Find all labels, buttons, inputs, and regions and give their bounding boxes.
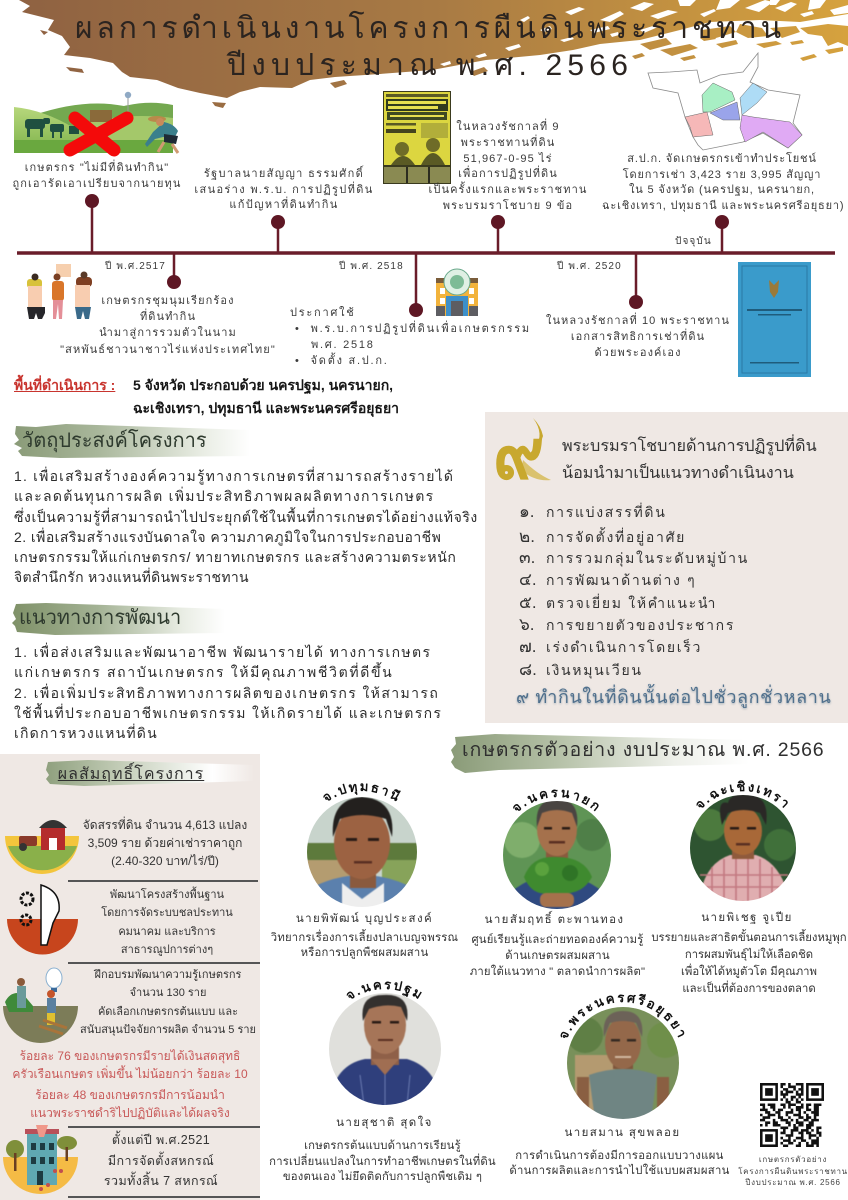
item 1: ๑. <box>519 502 535 521</box>
result: infrastructure: คมนาคม และบริการ <box>118 926 216 938</box>
icon: training farmers <box>3 964 79 1044</box>
objectives text <box>14 466 478 585</box>
operating area: 5 จังหวัด ประกอบด้วย นครปฐม, นครนายก, <box>133 377 393 393</box>
description: Ayutthaya farmer <box>502 1149 737 1179</box>
name: Ayutthaya farmer: นายสมาน สุขพลอย <box>565 1127 680 1139</box>
icon: blue title book <box>738 262 811 377</box>
result: cooperatives: ตั้งแต่ปี พ.ศ.2521 <box>112 1133 210 1147</box>
description: Pathum Thani farmer: หรือการปลูกพืชผสมผสาน <box>301 947 428 959</box>
icon: ALRO building <box>436 268 478 316</box>
QR caption <box>733 1154 848 1188</box>
banner brush stroke <box>19 0 848 108</box>
title: ผลการดำเนินงานโครงการผืนดินพระราชทาน <box>75 12 785 45</box>
item 5: ตรวจเยี่ยม ให้คำแนะนำ <box>546 595 717 611</box>
description: Chachoengsao farmer: เพื่อให้ได้หมูตัวโต มีคุณภาพ <box>681 966 817 978</box>
label: present: ปัจจุบัน <box>675 236 712 247</box>
text: farmers rally <box>60 294 276 356</box>
portrait and province: Chachoengsao: จ.ฉะเชิงเทรา <box>696 780 788 808</box>
policy heading: พระบรมราโชบายด้านการปฏิรูปที่ดิน <box>562 437 817 455</box>
result highlight: royal guidance: แนวพระราชดำริไปปฏิบัติและได้ผลจริง <box>30 1106 230 1120</box>
text: King Rama 10 grants documents: เอกสารสิทธิการเช่าที่ดิน <box>571 331 705 343</box>
item 1 <box>519 502 666 521</box>
title <box>75 10 785 82</box>
item 2: การจัดตั้งที่อยู่อาศัย <box>546 529 686 545</box>
objectives text: จิตสำนึกรัก หวงแหนที่ดินพระราชทาน <box>14 569 249 585</box>
icon: farm with red cross <box>14 92 180 156</box>
farmer: Pathum Thani <box>271 783 458 959</box>
item 3: ๓. <box>519 548 535 567</box>
text: farmers rally: "สหพันธ์ชาวนาชาวไร่แห่งประเทศไทย" <box>60 344 276 356</box>
portrait and province: Nakhon Nayok <box>503 790 611 909</box>
development text: ใช้พื้นที่ประกอบอาชีพเกษตรกรรม ให้เกิดรายได้ และเกษตรกร <box>14 705 442 721</box>
text: farmers rally: นำมาสู่การรวมตัวในนาม <box>99 327 237 339</box>
heading: development: แนวทางการพัฒนา <box>19 607 181 629</box>
result: training: จำนวน 130 ราย <box>130 987 206 999</box>
text: ALRO tenants: ฉะเชิงเทรา, ปทุมธานี และพระนครศรีอยุธยา) <box>602 200 844 212</box>
text: farmers rally: เกษตรกรชุมนุมเรียกร้อง <box>101 295 235 307</box>
result highlight: income: ครัวเรือนเกษตร เพิ่มขึ้น ไม่น้อยกว่า ร้อยละ 10 <box>12 1067 248 1081</box>
icon: protesters <box>27 264 92 319</box>
description: Chachoengsao farmer: และเป็นที่ต้องการของตลาด <box>682 983 816 995</box>
panel: project results <box>0 754 260 1200</box>
operating area <box>14 374 399 417</box>
text: landless farmers: เกษตรกร "ไม่มีที่ดินทำกิน" <box>25 162 169 174</box>
QR caption: โครงการผืนดินพระราชทาน <box>738 1166 848 1176</box>
description: Nakhon Nayok farmer: ภายใต้แนวทาง " ตลาดนำการผลิต" <box>470 966 645 978</box>
icon: farm semicircle <box>5 820 79 874</box>
brush heading: model farmers <box>451 734 720 773</box>
label: year 2517: ปี พ.ศ.2517 <box>105 261 166 272</box>
heading: objectives: วัตถุประสงค์โครงการ <box>22 430 207 452</box>
result: infrastructure: สาธารณูปการต่างๆ <box>121 944 213 956</box>
text: ALRO tenants <box>602 152 844 212</box>
item 8 <box>519 660 643 679</box>
text: King Rama 9 grants land: พระบรมราโชบาย 9 ข้อ <box>443 200 573 212</box>
text: King Rama 9 grants land: ในหลวงรัชกาลที่ 9 <box>456 121 560 133</box>
text: King Rama 9 grants land <box>429 118 587 212</box>
icon: yellow poster <box>383 91 451 184</box>
icon: cooperative building <box>3 1121 79 1199</box>
result: training: สนับสนุนปัจจัยการผลิต จำนวน 5 ราย <box>80 1024 256 1036</box>
result: cooperatives: รวมทั้งสิ้น 7 สหกรณ์ <box>104 1174 218 1188</box>
name: Chachoengsao farmer: นายพิเชฐ จูเปีย <box>701 912 793 924</box>
text: King Rama 10 grants documents <box>546 312 730 359</box>
text: law announced: • พ.ร.บ.การปฏิรูปที่ดินเพื่อเกษตรกรรม <box>295 323 531 335</box>
QR caption: เกษตรกรตัวอย่าง <box>759 1155 827 1164</box>
result highlight: income <box>0 1047 260 1083</box>
description: Pathum Thani farmer: วิทยากรเรื่องการเลี้ยงปลาเบญจพรรณ <box>271 932 458 944</box>
description: Nakhon Pathom farmer <box>265 1139 500 1186</box>
item 8: เงินหมุนเวียน <box>546 662 643 678</box>
text: King Rama 10 grants documents: ด้วยพระองค์เอง <box>594 347 682 359</box>
brush heading: results <box>46 760 241 786</box>
text: draft land reform bill: รัฐบาลนายสัญญา ธรรมศักดิ์ <box>204 168 364 180</box>
result: cooperatives: มีการจัดตั้งสหกรณ์ <box>108 1154 214 1168</box>
result highlight: income: ร้อยละ 76 ของเกษตรกรมีรายได้เงินสดสุทธิ <box>20 1049 240 1063</box>
item 6: การขยายตัวของประชากร <box>546 617 735 633</box>
description: Nakhon Pathom farmer: การเปลี่ยนแปลงในการทำอาชีพเกษตรในที่ดิน <box>269 1156 496 1168</box>
description: Nakhon Pathom farmer: เกษตรกรต้นแบบด้านการเรียนรู้ <box>304 1140 461 1152</box>
portrait and province: Nakhon Nayok: จ.นครนายก <box>513 790 599 812</box>
result: land allocation: (2.40-320 บาท/ไร่/ปี) <box>111 854 219 868</box>
text: farmers rally: ที่ดินทำกิน <box>140 311 196 323</box>
item 7: เร่งดำเนินการโดยเร็ว <box>546 639 702 655</box>
portrait and province: Chachoengsao <box>690 780 796 901</box>
text: ALRO tenants: โดยการเช่า 3,423 ราย 3,995 สัญญา <box>623 169 821 181</box>
objectives text: และลดต้นทุนการผลิต เพิ่มประสิทธิภาพผลผลิตทางการเกษตร <box>14 488 434 504</box>
description: Ayutthaya farmer: ด้านการผลิตและการนำไปใช้แบบผสมผสาน <box>509 1165 730 1177</box>
description: Nakhon Nayok farmer: ด้านเกษตรผสมผสาน <box>505 950 610 962</box>
name: Nakhon Nayok farmer: นายสัมฤทธิ์ ตะพานทอง <box>485 914 624 926</box>
result: training: คัดเลือกเกษตรกรต้นแบบ และ <box>98 1006 238 1018</box>
text: King Rama 10 grants documents: ในหลวงรัชกาลที่ 10 พระราชทาน <box>546 315 730 327</box>
QR code <box>760 1083 824 1147</box>
development text: 2. เพื่อเพิ่มประสิทธิภาพทางการผลิตของเกษตรกร ให้สามารถ <box>14 685 439 701</box>
brush heading: development <box>12 603 212 635</box>
result highlight: royal guidance <box>0 1086 260 1122</box>
text: King Rama 9 grants land: 51,967-0-95 ไร่ <box>463 153 553 165</box>
name: Nakhon Pathom farmer: นายสุชาติ สุดใจ <box>336 1117 433 1129</box>
portrait and province: Ayutthaya <box>560 994 684 1119</box>
description: Ayutthaya farmer: การดำเนินการต้องมีการออกแบบวางแผน <box>515 1150 724 1162</box>
description: Chachoengsao farmer: การผสมพันธุ์ไม่ให้เลือดชิด <box>685 949 813 961</box>
development text: แก่เกษตรกร สถาบันเกษตรกร ให้มีคุณภาพชีวิตที่ดีขึ้น <box>14 664 393 680</box>
panel: royal land reform policy <box>485 412 848 723</box>
text: landless farmers <box>12 160 182 190</box>
development text: 1. เพื่อส่งเสริมและพัฒนาอาชีพ พัฒนารายได้ ทางการเกษตร <box>14 644 431 660</box>
objectives text: 2. เพื่อเสริมสร้างแรงบันดาลใจ ความภาคภูมิใจในการประกอบอาชีพ <box>14 529 441 545</box>
icon: gears and bulb <box>7 884 78 954</box>
text: draft land reform bill: แก้ปัญหาที่ดินทำกิน <box>229 199 339 211</box>
section: development approach <box>12 603 442 741</box>
result: infrastructure <box>101 886 233 956</box>
text: draft land reform bill <box>194 166 374 211</box>
objectives text: ซึ่งเป็นความรู้ที่สามารถนำไปประยุกต์ใช้ในพื้นที่การเกษตรได้อย่างแท้จริง <box>14 509 478 525</box>
description: Pathum Thani farmer <box>262 931 467 961</box>
text: ALRO tenants: ส.ป.ก. จัดเกษตรกรเข้าทำประโยชน์ <box>627 153 817 165</box>
heading: model farmers: เกษตรกรตัวอย่าง งบประมาณ พ.ศ. 2566 <box>462 739 824 761</box>
description: Nakhon Pathom farmer: ของตนเอง ไม่ยึดติดกับการปลูกพืชเดิม ๆ <box>283 1171 482 1183</box>
result: training: ฝึกอบรมพัฒนาความรู้เกษตรกร <box>95 969 241 981</box>
heading: results: ผลสัมฤทธิ์โครงการ <box>58 766 204 783</box>
text: law announced: พ.ศ. 2518 <box>311 339 375 351</box>
result: land allocation: จัดสรรที่ดิน จำนวน 4,613 แปลง <box>83 818 247 832</box>
result: infrastructure: พัฒนาโครงสร้างพื้นฐาน <box>110 889 224 901</box>
objectives text: 1. เพื่อเสริมสร้างองค์ความรู้ทางการเกษตรที่สามารถสร้างรายได้ <box>14 468 454 484</box>
item 4: ๔. <box>519 570 537 589</box>
description: Nakhon Nayok farmer: ศูนย์เรียนรู้และถ่ายทอดองค์ความรู้ <box>471 934 644 946</box>
portrait and province: Pathum Thani <box>307 783 417 907</box>
text: landless farmers: ถูกเอารัดเอาเปรียบจากนายทุน <box>12 178 182 190</box>
text: King Rama 9 grants land: เป็นครั้งแรกและพระราชทาน <box>429 184 587 196</box>
text: draft land reform bill: เสนอร่าง พ.ร.บ. การปฏิรูปที่ดิน <box>194 184 374 196</box>
farmer: Nakhon Pathom <box>269 981 496 1183</box>
text: King Rama 9 grants land: เพื่อการปฏิรูปที่ดิน <box>458 168 558 180</box>
portrait and province: Ayutthaya: จ.พระนครศรีอยุธยา <box>560 994 684 1038</box>
description: Chachoengsao farmer: บรรยายและสาธิตขั้นตอนการเลี้ยงหมูพุก <box>651 932 847 944</box>
development text <box>14 642 442 741</box>
name: Pathum Thani farmer: นายพิพัฒน์ บุญประสงค์ <box>296 913 433 925</box>
item 7: ๗. <box>519 637 537 656</box>
operating area: พื้นที่ดำเนินการ : <box>14 377 115 393</box>
result: infrastructure: โดยการจัดระบบชลประทาน <box>101 907 233 919</box>
portrait and province: Nakhon Pathom <box>329 981 441 1105</box>
text: law announced <box>290 306 531 367</box>
icon: gold Thai nine: ๙ <box>493 415 544 493</box>
item 2: ๒. <box>519 527 535 546</box>
text: King Rama 9 grants land: พระราชทานที่ดิน <box>461 137 555 149</box>
description: Nakhon Nayok farmer <box>455 932 660 980</box>
item 5: ๕. <box>519 593 537 612</box>
description: Chachoengsao farmer <box>649 930 848 998</box>
item 4: การพัฒนาด้านต่าง ๆ <box>546 572 696 588</box>
item 1: การแบ่งสรรที่ดิน <box>546 504 666 520</box>
result: training <box>68 966 268 1039</box>
result: cooperatives <box>61 1130 261 1192</box>
result highlight: royal guidance: ร้อยละ 48 ของเกษตรกรมีการน้อมนำ <box>35 1088 225 1102</box>
farmer: Ayutthaya <box>509 994 730 1177</box>
portrait and province: Pathum Thani: จ.ปทุมธานี <box>323 783 401 802</box>
operating area: ฉะเชิงเทรา, ปทุมธานี และพระนครศรีอยุธยา <box>133 400 399 416</box>
text: law announced: ประกาศใช้ <box>290 307 355 319</box>
item 3: การรวมกลุ่มในระดับหมู่บ้าน <box>546 550 749 566</box>
policy heading <box>562 434 817 482</box>
timeline axis and pins <box>17 194 835 317</box>
item 9 highlighted: ๙ ทำกินในที่ดินนั้นต่อไปชั่วลูกชั่วหลาน <box>516 687 831 707</box>
timeline <box>12 52 844 377</box>
result: land allocation: 3,509 ราย ด้วยค่าเช่าราคาถูก <box>88 836 242 850</box>
objectives text: เกษตรกรรมให้แก่เกษตรกร/ ทายาทเกษตรกร และสร้างความตระหนัก <box>14 549 456 565</box>
brush heading: objectives <box>14 424 236 458</box>
portrait and province: Nakhon Pathom: จ.นครปฐม <box>346 981 422 999</box>
title: ปีงบประมาณ พ.ศ. 2566 <box>227 49 633 82</box>
policy heading: น้อมนำมาเป็นแนวทางดำเนินงาน <box>562 464 794 482</box>
farmer: Nakhon Nayok <box>470 790 645 978</box>
text: ALRO tenants: ใน 5 จังหวัด (นครปฐม, นครนายก, <box>629 184 815 196</box>
label: year 2518: ปี พ.ศ. 2518 <box>339 261 404 272</box>
item 6: ๖. <box>519 615 535 634</box>
result: land allocation <box>83 816 247 868</box>
icon: province map <box>648 52 802 150</box>
label: year 2520: ปี พ.ศ. 2520 <box>557 261 622 272</box>
farmer: Chachoengsao <box>651 780 847 995</box>
section: objectives <box>14 424 478 585</box>
text: law announced: • จัดตั้ง ส.ป.ก. <box>295 355 389 367</box>
QR caption: ปีงบประมาณ พ.ศ. 2566 <box>745 1178 841 1187</box>
development text: เกิดการหวงแหนที่ดิน <box>14 725 158 741</box>
item 8: ๘. <box>519 660 537 679</box>
